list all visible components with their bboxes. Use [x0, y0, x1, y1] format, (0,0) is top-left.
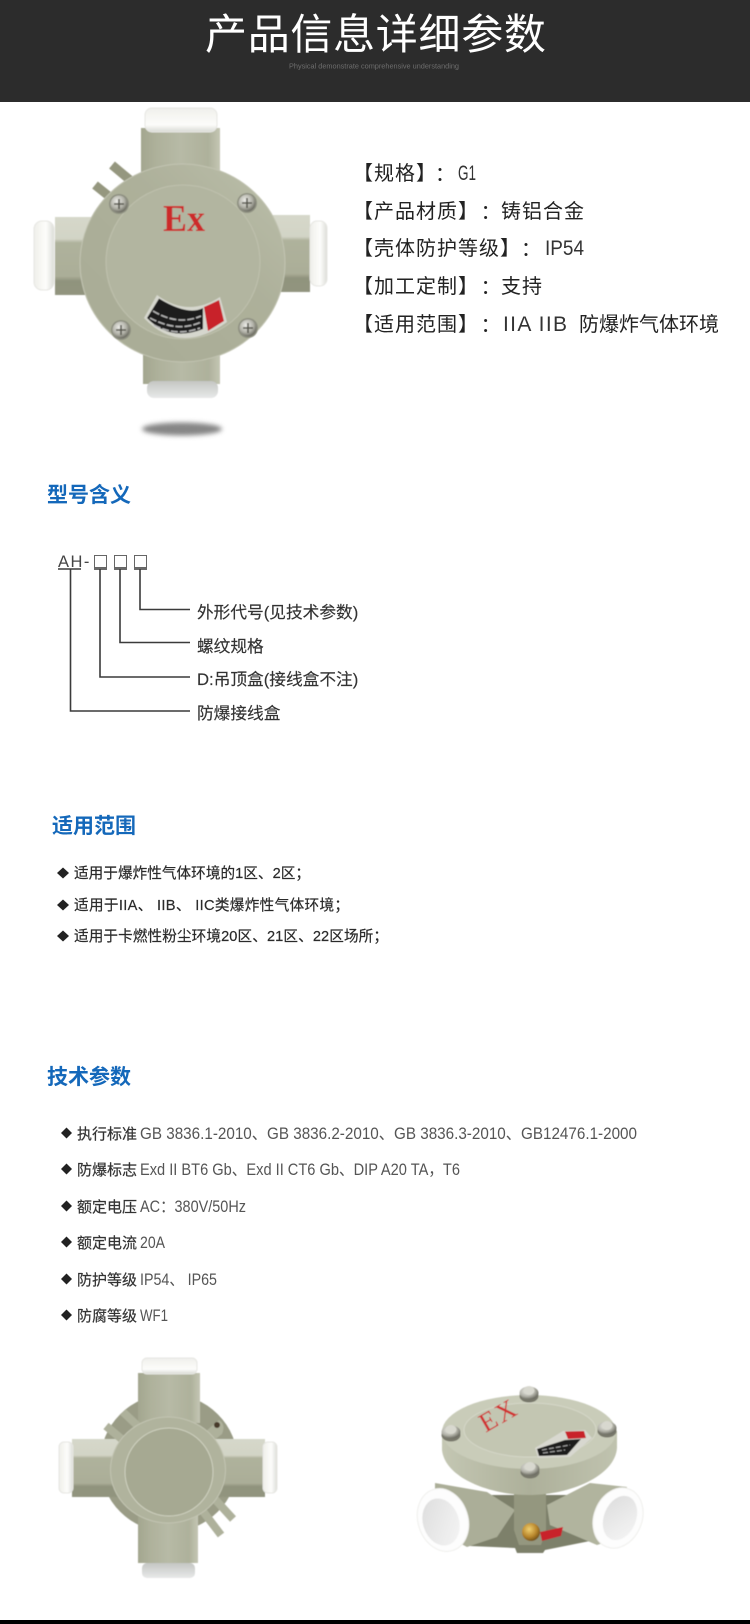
right arm — [547, 1483, 627, 1545]
left cap — [409, 1482, 477, 1558]
parameter: current — [61, 1234, 165, 1252]
parameter: corrosion: 防腐等级 — [77, 1307, 137, 1325]
left arm and cap — [34, 217, 100, 295]
spec: material: ： — [476, 197, 496, 226]
label: shape code: 外形代号(见技术参数) — [197, 603, 358, 622]
inner lid — [464, 1403, 596, 1457]
right arm and cap — [268, 215, 327, 292]
spec: scope: IIA IIB — [503, 313, 567, 336]
nameplate — [535, 1430, 592, 1458]
parameter: protection — [61, 1271, 217, 1289]
parameter: standard: 执行标准 — [77, 1126, 137, 1143]
cover screws — [109, 193, 258, 340]
spec: protection: IP54 — [545, 237, 584, 260]
spec: customisation: 【加工定制】 — [353, 275, 479, 298]
right cap — [584, 1480, 652, 1556]
spec: scope: 防爆炸气体环境 — [579, 313, 719, 336]
top arm and cap — [141, 108, 220, 173]
spec: material: 铸铝合金 — [501, 200, 585, 223]
product photo: junction box angled view — [409, 1386, 652, 1558]
heading: model meaning: 型号含义 — [47, 484, 131, 507]
bottom arm and cap — [138, 1515, 198, 1578]
spec: protection: 【壳体防护等级】 — [353, 237, 521, 260]
heading: technical parameters: 技术参数 — [47, 1065, 131, 1089]
spec: size: ： — [430, 159, 450, 188]
scope item 2: 适用于IIA、 IIB、 IIC类爆炸性气体环境； — [74, 896, 349, 914]
mounting tabs — [95, 165, 130, 197]
spec: size: 【规格】 — [353, 162, 437, 185]
parameter: voltage: 额定电压 — [77, 1199, 137, 1216]
parameter: corrosion — [61, 1307, 168, 1325]
right arm and cap — [215, 1439, 277, 1497]
label: thread spec: 螺纹规格 — [197, 637, 264, 656]
left arm and cap — [59, 1439, 122, 1497]
technical parameters list — [61, 1125, 637, 1325]
spec: material: 【产品材质】 — [353, 200, 479, 223]
rear housing — [100, 1394, 238, 1532]
body side — [442, 1431, 617, 1495]
centre post — [514, 1490, 546, 1545]
model code diagram — [58, 553, 358, 723]
spec: scope: ： — [476, 310, 496, 339]
parameter: voltage: AC：380V/50Hz — [140, 1198, 246, 1216]
Ex mark: EX — [474, 1392, 523, 1438]
spec: scope: 【适用范围】 — [353, 313, 479, 336]
label: ceiling box: D:吊顶盒(接线盒不注) — [197, 670, 358, 689]
spec: size — [353, 159, 476, 188]
parameter: voltage — [61, 1198, 246, 1216]
parameter: corrosion: WF1 — [140, 1307, 168, 1325]
spec: customisation: 支持 — [501, 275, 543, 298]
connector lines — [58, 569, 190, 711]
scope item 3: 适用于卡燃性粉尘环境20区、21区、22区场所； — [74, 927, 388, 945]
scope item 1: 适用于爆炸性气体环境的1区、2区； — [74, 864, 310, 882]
left arm — [435, 1483, 515, 1547]
dark underside — [470, 1495, 595, 1553]
bottom bar — [0, 1620, 750, 1624]
parameter: marking: 防爆标志 — [77, 1162, 137, 1179]
Ex mark: Ex — [163, 198, 205, 240]
header banner — [0, 0, 750, 102]
application scope list — [57, 864, 388, 945]
nameplate — [144, 295, 227, 338]
top arm and cap — [138, 1358, 200, 1423]
earth bolt — [522, 1523, 540, 1541]
earth tag — [540, 1527, 563, 1541]
spec: scope — [353, 310, 719, 339]
parameter: current: 20A — [140, 1234, 165, 1252]
spec: material — [353, 197, 585, 226]
round body — [80, 164, 285, 362]
spec: protection: ： — [516, 234, 536, 263]
inner lid — [106, 185, 260, 339]
model code — [58, 553, 146, 571]
parameter: current: 额定电流 — [77, 1235, 137, 1252]
screw hole — [214, 1422, 220, 1428]
model code: AH- — [58, 553, 91, 571]
heading: application scope: 适用范围 — [52, 815, 136, 838]
label: explosion-proof box: 防爆接线盒 — [197, 704, 281, 723]
spec: customisation — [353, 272, 543, 301]
product photo: junction box front view — [34, 108, 327, 436]
bottom arm and cap — [143, 350, 220, 398]
parameter: protection: IP54、 IP65 — [140, 1271, 217, 1289]
product specification list — [353, 159, 719, 339]
parameter: marking: Exd II BT6 Gb、Exd II CT6 Gb、DIP A20 TA，T6 — [140, 1161, 460, 1179]
spec: size: G1 — [458, 162, 476, 185]
round cover — [125, 1428, 213, 1516]
floating shadow — [142, 422, 222, 436]
product photo: junction box rear view — [59, 1358, 277, 1578]
spec: customisation: ： — [476, 272, 496, 301]
cover nuts — [442, 1386, 616, 1478]
top disc — [442, 1395, 616, 1469]
round flange — [110, 1417, 226, 1523]
spec: protection — [353, 234, 584, 263]
title: 产品信息详细参数 — [205, 11, 547, 58]
eared flange — [205, 1420, 223, 1442]
mounting tabs — [106, 1412, 233, 1535]
subtitle: Physical demonstrate comprehensive understanding — [289, 62, 459, 70]
parameter: standard: GB 3836.1-2010、GB 3836.2-2010、GB 3836.3-2010、GB12476.1-2000 — [140, 1125, 637, 1143]
parameter: protection: 防护等级 — [77, 1271, 137, 1289]
